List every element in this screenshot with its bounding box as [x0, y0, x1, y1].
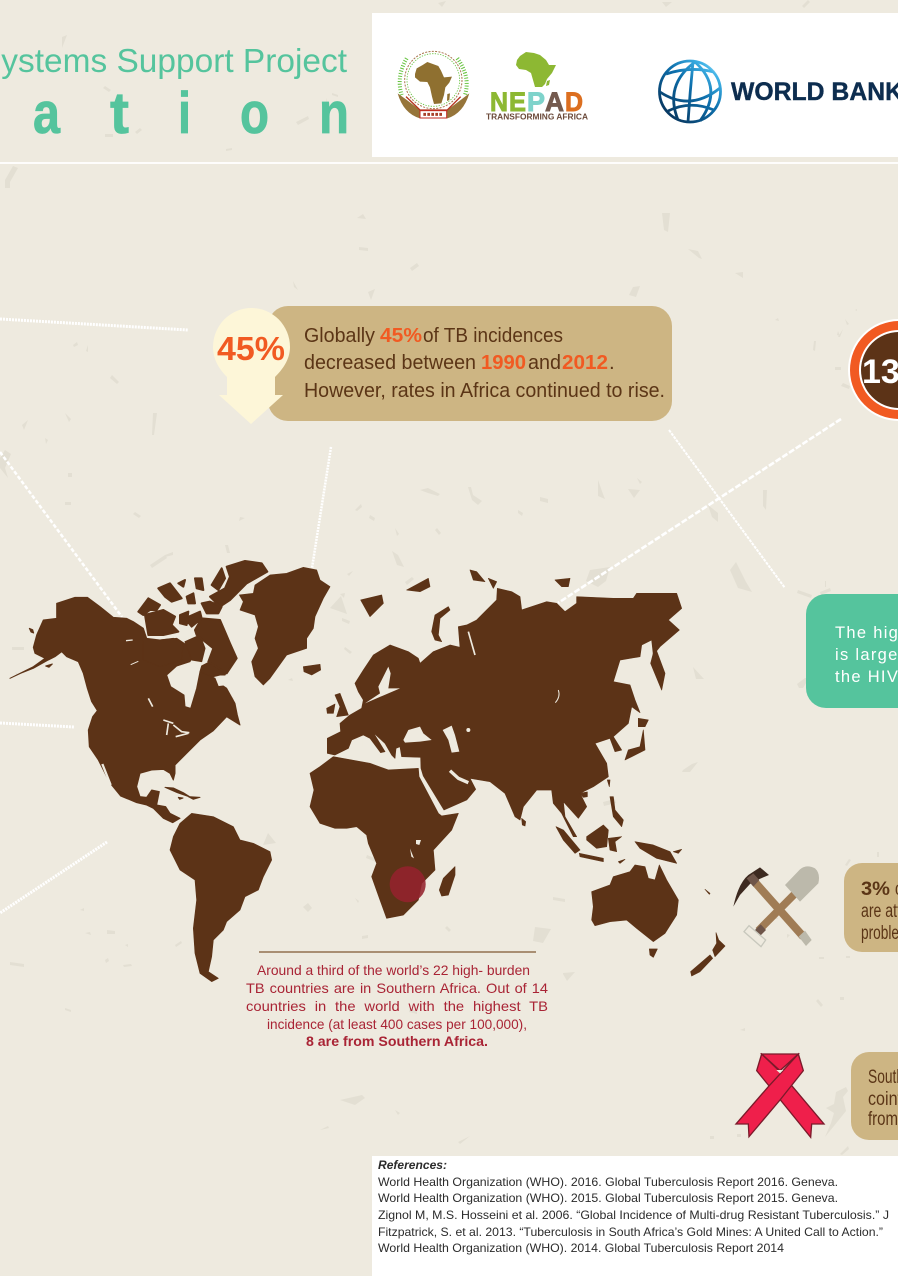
australia: [592, 865, 678, 942]
marker: Southern Africa: [390, 866, 426, 902]
callout text: 45%: [380, 324, 422, 347]
icon: down arrow pin: [213, 308, 290, 424]
callout text: decreased between: [304, 351, 476, 374]
callout text: [304, 324, 665, 402]
title: a: [33, 81, 61, 146]
eurasia, africa and oceania: [310, 570, 725, 976]
callout: coinfection: [851, 1052, 898, 1140]
connector lines: [0, 319, 841, 913]
logo: NEPAD: [486, 52, 588, 122]
logo: NEPAD: P: [527, 87, 545, 117]
inland seas: [365, 667, 470, 753]
callout: 45% decline: 45%: [217, 330, 285, 367]
callout text: However, rates in Africa continued to rise.: [304, 379, 665, 402]
logo: NEPAD: A: [545, 87, 564, 117]
text block: Southern Africa: [246, 951, 548, 1049]
callout: mining: 3%: [861, 879, 890, 900]
text block: Southern Africa: incidence (at least 400 cases per 100,000),: [267, 1016, 527, 1032]
callout: HIV epidemic: The hig: [835, 624, 898, 642]
eurasia: [327, 588, 682, 837]
panel: references: World Health Organization (WHO). 2015. Global Tuberculosis Report 2015. Geneva.: [378, 1191, 838, 1205]
callout: HIV epidemic: the HIV: [835, 668, 898, 686]
panel: references: Zignol M, M.S. Hosseini et al. 2006. “Global Incidence of Multi-drug Resistant Tuberculosis.” J: [378, 1208, 889, 1222]
panel: references: References:: [378, 1158, 447, 1172]
title: [0, 43, 349, 146]
iceland: [303, 664, 321, 675]
text block: Southern Africa: Around a third of the world’s 22 high- burden: [257, 962, 530, 978]
icon: red ribbon: [736, 1054, 824, 1137]
text block: Southern Africa: countries in the world with the highest TB: [246, 998, 548, 1014]
logo: World Bank: [660, 61, 898, 122]
arctic islands, greenland and iceland: [138, 561, 330, 685]
panel: logos: [372, 13, 898, 157]
title: i: [178, 81, 191, 146]
callout text: .: [609, 351, 615, 374]
icon: pickaxe and shovel: [733, 866, 819, 947]
world map: [10, 561, 725, 982]
callout text: Globally: [304, 324, 376, 347]
north and central america: [10, 597, 240, 823]
logo: NEPAD: D: [565, 87, 583, 117]
callout text: 1990: [481, 351, 526, 374]
tasmania and new zealand: [649, 889, 725, 976]
logo: NEPAD: TRANSFORMING AFRICA: [486, 112, 588, 122]
islands: [327, 570, 682, 896]
greenland: [239, 567, 330, 685]
callout text: 2012: [562, 351, 608, 374]
panel: references: Fitzpatrick, S. et al. 2013. “Tuberculosis in South Africa’s Gold Mines: A United Call to Action.”: [378, 1225, 883, 1239]
callout text: of TB incidences: [423, 324, 563, 347]
text block: Southern Africa: 8 are from Southern Africa.: [306, 1033, 488, 1049]
panel: references: World Health Organization (WHO). 2014. Global Tuberculosis Report 2014: [378, 1241, 784, 1255]
callout text: and: [528, 351, 561, 374]
logo: NEPAD: N: [490, 87, 508, 117]
kamchatka peninsula: [651, 647, 665, 690]
title: n: [319, 81, 349, 146]
callout: 45% decline: [213, 306, 672, 424]
text block: Southern Africa: TB countries are in Southern Africa. Out of 14: [246, 980, 548, 996]
title: t: [110, 81, 129, 146]
south america: [170, 813, 272, 982]
africa: [310, 757, 458, 918]
logo: African Union emblem: [398, 51, 469, 118]
callout: HIV epidemic: is large: [835, 646, 898, 664]
panel: references: World Health Organization (WHO). 2016. Global Tuberculosis Report 2016. Geneva.: [378, 1175, 838, 1189]
panel: references: [372, 1156, 898, 1276]
badge: 13: [848, 319, 898, 421]
title: o: [240, 81, 269, 146]
callout: mining: [844, 863, 898, 952]
callout: HIV epidemic: [806, 594, 898, 708]
logo: NEPAD: E: [509, 87, 526, 117]
